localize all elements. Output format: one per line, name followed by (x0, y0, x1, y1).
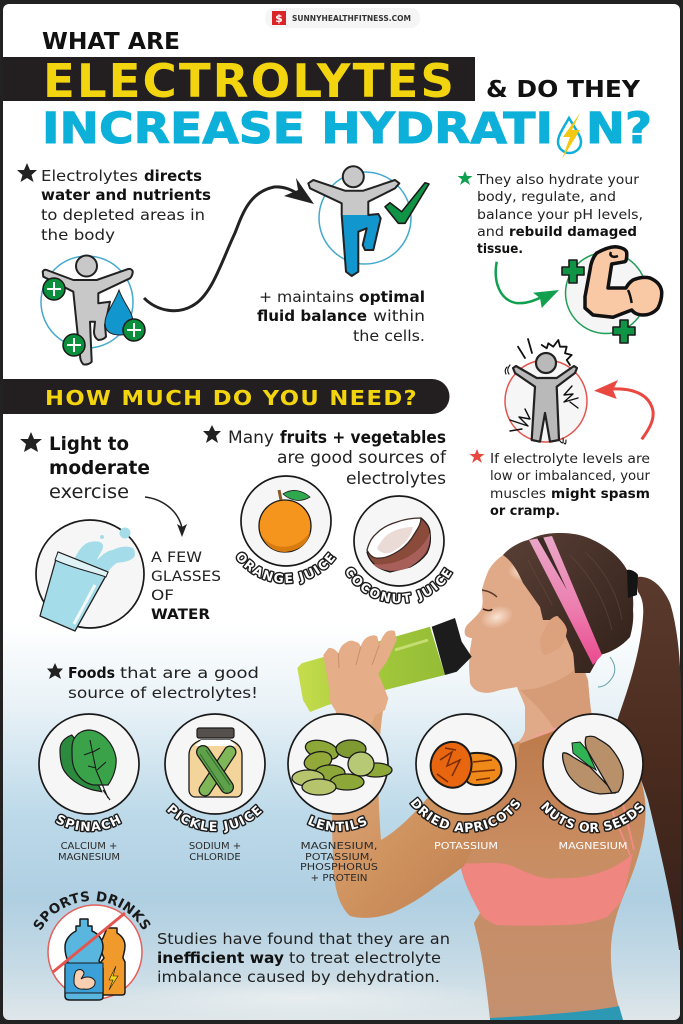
text: fruits and vegetables: fruits + vegetables (280, 428, 446, 447)
text: light to moderate exercise: moderate (49, 457, 150, 479)
back strap (609, 800, 634, 855)
title: & DO THEY (486, 77, 640, 103)
website logo pill: $ (275, 12, 283, 25)
stray hair strand (598, 657, 615, 687)
nutrient labels: PHOSPHORUS (300, 862, 378, 873)
icon: coconut juice (344, 495, 454, 604)
text: muscle cramp warning: low or imbalanced, your (490, 468, 650, 484)
forehead glow (508, 561, 534, 581)
text: a few glasses of water: A FEW (151, 550, 202, 566)
text: studies on sports drinks: inefficient way (157, 949, 284, 967)
icon: spinach (38, 713, 140, 832)
ponytail (615, 577, 681, 950)
label: orange juice: ORANGE JUICE (236, 551, 337, 586)
text: foods heading: source of electrolytes! (68, 684, 258, 702)
label: coconut juice: COCONUT JUICE (344, 566, 454, 604)
ear (540, 616, 567, 655)
text: a few glasses of water (151, 550, 221, 623)
text: a few glasses of water: WATER (151, 607, 210, 623)
text: directs water and nutrients: the body (41, 226, 115, 244)
text: directs water and nutrients: Electrolytes (41, 167, 138, 185)
icon: glass of water (36, 520, 144, 631)
text: directs water and nutrients: to depleted areas in (41, 206, 205, 224)
text: muscle cramp warning: or cramp. (490, 503, 560, 519)
hair (503, 533, 633, 673)
icon: water drop with bolt (558, 113, 581, 159)
text: maintains optimal fluid balance (257, 288, 425, 345)
sports bra (460, 853, 633, 926)
label: dried apricots: DRIED APRICOTS (409, 796, 522, 834)
nutrient labels: SODIUM + (189, 841, 241, 852)
upper arm and forearm (332, 705, 520, 918)
photo: woman drinking from a bottle (297, 533, 681, 1020)
text: fruits and vegetables (203, 425, 447, 488)
text: light to moderate exercise: exercise (49, 481, 129, 503)
eyebrow (482, 590, 497, 597)
text: foods heading (47, 663, 259, 702)
text: studies on sports drinks: Studies have found that they are an (157, 930, 450, 948)
text: studies on sports drinks (157, 930, 450, 986)
text: maintains optimal fluid balance: optimal (359, 288, 425, 306)
title: ELECTROLYTES (43, 54, 456, 108)
text: directs water and nutrients (17, 163, 211, 244)
nutrient labels (58, 841, 628, 884)
nutrient labels: MAGNESIUM, (300, 841, 378, 852)
text: muscle cramp warning: muscles (490, 486, 546, 502)
icon: flexed muscle with plus signs (562, 247, 662, 343)
nutrient labels: MAGNESIUM (58, 852, 120, 863)
text: a few glasses of water: GLASSES (151, 569, 221, 585)
text: maintains optimal fluid balance: the cells. (353, 327, 425, 345)
text: maintains optimal fluid balance: within (373, 307, 425, 325)
hair highlights (528, 552, 622, 630)
text: maintains optimal fluid balance: fluid balance (257, 307, 367, 325)
icon: water drop (105, 290, 133, 335)
text: fruits and vegetables: electrolytes (346, 469, 446, 488)
icon: check mark (385, 183, 429, 223)
text: directs water and nutrients: directs (144, 167, 202, 185)
text: they also hydrate: body, regulate, and (477, 189, 616, 205)
text: fruits and vegetables: Many (228, 428, 274, 447)
closed eye (483, 609, 492, 610)
text: they also hydrate: They also hydrate your (476, 172, 639, 188)
heading banner: HOW MUCH DO YOU NEED? (45, 386, 418, 410)
title: INCREASE HYDRATI (42, 104, 553, 154)
nutrient labels: MAGNESIUM (558, 841, 628, 852)
icon: dried apricots (409, 713, 522, 834)
arrow: green curve to muscle (496, 262, 559, 308)
icon: depleted figure with plus signs (41, 256, 145, 365)
text: studies on sports drinks: imbalance caused by dehydration. (157, 968, 440, 986)
swimwear bottom (490, 1006, 623, 1020)
hair tie (627, 570, 638, 598)
headband gap (537, 537, 567, 590)
text: muscle cramp warning (470, 449, 650, 519)
text: muscle cramp warning: might spasm (551, 486, 650, 502)
icon: pickle juice (164, 713, 266, 834)
icon: nuts or seeds (540, 713, 646, 834)
nutrient labels: CALCIUM + (61, 841, 117, 852)
arrow: red curve to cramping figure (594, 380, 653, 439)
bottle (297, 627, 445, 712)
label: nuts or seeds: NUTS OR SEEDS (540, 800, 646, 834)
text: a few glasses of water: OF (151, 588, 174, 604)
icon: hydrated figure with check (308, 166, 429, 276)
arrow: exercise to water (145, 497, 187, 537)
text: they also hydrate: tissue. (477, 241, 523, 257)
neck shadow (520, 665, 592, 731)
icon: sports drinks crossed out (34, 891, 151, 1001)
icon: orange juice (236, 475, 337, 586)
bottle cap (432, 618, 472, 675)
icon: cramping figure (505, 339, 587, 444)
label: spinach: SPINACH (54, 813, 122, 832)
arrow: curve to hydrated figure (144, 178, 314, 311)
neck and face (465, 555, 592, 745)
text: muscle cramp warning: If electrolyte levels are (490, 451, 650, 467)
finger creases (338, 645, 379, 668)
label: lentils: LENTILS (306, 814, 368, 832)
text: directs water and nutrients: water and nutrients (41, 186, 211, 204)
title: WHAT ARE (42, 29, 180, 55)
hand and fingers (323, 630, 397, 725)
text: they also hydrate: balance your pH levels, (477, 207, 643, 223)
text: they also hydrate: rebuild damaged (509, 224, 637, 240)
nutrient labels: POTASSIUM, (305, 852, 373, 863)
bra strap near neck (533, 728, 557, 737)
title (3, 29, 652, 159)
label: pickle juice: PICKLE JUICE (166, 802, 264, 834)
headband (529, 536, 602, 665)
text: foods heading: that are a good (120, 664, 259, 682)
nutrient labels: + PROTEIN (310, 873, 368, 884)
text: light to moderate exercise: Light to (49, 433, 129, 455)
text: fruits and vegetables: are good sources of (277, 448, 447, 467)
label: sports drinks: SPORTS DRINKS (34, 891, 151, 930)
torso (460, 714, 646, 1020)
website logo pill (265, 8, 420, 28)
title: N? (586, 104, 652, 154)
website logo pill: SUNNYHEALTHFITNESS.COM (292, 14, 411, 23)
text: they also hydrate (458, 171, 643, 257)
text: they also hydrate: and (477, 224, 504, 240)
text: light to moderate exercise (20, 432, 150, 503)
text: foods heading: Foods (68, 664, 115, 682)
text: maintains optimal fluid balance: + maintains (259, 288, 354, 306)
nutrient labels: POTASSIUM (434, 841, 498, 852)
cheek glow (477, 601, 517, 633)
icon: lentils (287, 713, 393, 832)
heading banner (3, 379, 450, 414)
icon: plus signs (43, 278, 145, 356)
nutrient labels: CHLORIDE (189, 852, 241, 863)
text: studies on sports drinks: to treat electrolyte (289, 949, 441, 967)
